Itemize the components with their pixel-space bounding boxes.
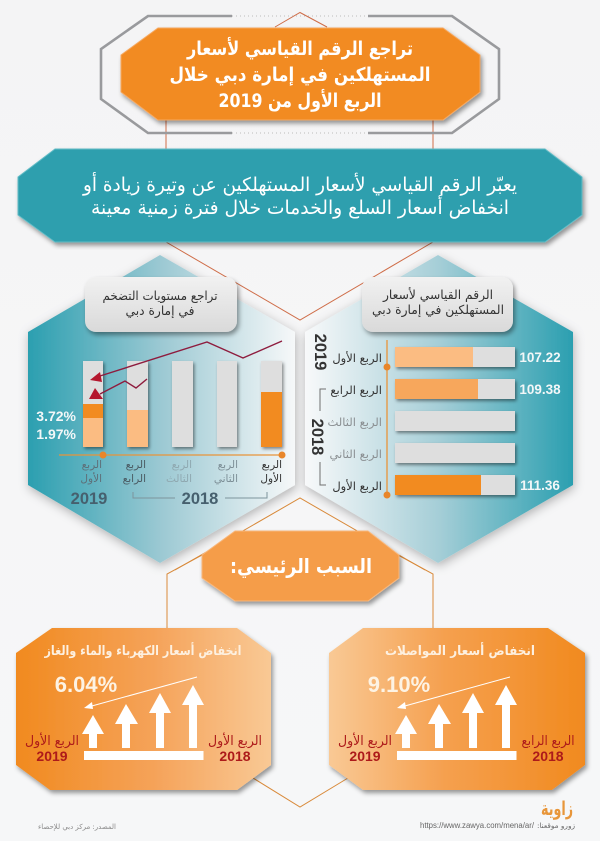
period labels: 2019 (349, 748, 381, 764)
period labels (338, 732, 574, 764)
teal definition banner: انخفاض أسعار السلع والخدمات خلال فترة زمنية معينة (91, 195, 509, 219)
teal definition banner: يعبّر الرقم القياسي لأسعار المستهلكين عن وتيرة زيادة أو (82, 172, 517, 196)
quarter labels: الربع الثالث (328, 415, 382, 430)
percent values (36, 408, 77, 442)
quarter labels: الربع الأول (332, 351, 382, 366)
year labels: 2018 (182, 490, 218, 508)
callout: CPI heading: الرقم القياسي لأسعار (382, 287, 493, 303)
title banner (121, 28, 480, 120)
callout: inflation heading: في إمارة دبي (126, 303, 195, 319)
year labels (71, 490, 267, 508)
year labels (308, 334, 329, 485)
period labels: الربع الأول (208, 732, 262, 749)
quarter labels: الأول (260, 472, 282, 485)
title banner: تراجع الرقم القياسي لأسعار (186, 37, 413, 60)
percent value: 9.10% (368, 672, 430, 697)
source note: المصدر: مركز دبي للإحصاء (38, 823, 116, 831)
website line: زورو موقعنا: (537, 822, 575, 830)
year labels: 2019 (71, 490, 107, 508)
timeline axis (59, 452, 286, 458)
quarter labels: الربع (172, 459, 192, 471)
period labels: 2018 (219, 748, 251, 764)
panel: transport (329, 628, 585, 790)
panel: electricity, water and gas (16, 628, 271, 790)
quarter labels: الرابع (123, 473, 146, 485)
CPI values: 111.36 (520, 478, 560, 493)
quarter labels (328, 351, 382, 494)
timeline axis (384, 340, 390, 498)
quarter labels: الربع الأول (332, 479, 382, 494)
CPI values: 109.38 (519, 382, 561, 397)
grey octagon frame (101, 16, 499, 133)
CPI values (519, 350, 561, 493)
period labels: الربع الأول (25, 732, 79, 749)
heading: main reason (202, 531, 399, 601)
trend arrow (397, 677, 510, 709)
quarter labels: الثاني (214, 473, 238, 485)
callout: inflation heading: تراجع مستويات التضخم (102, 288, 218, 304)
callout: CPI heading (362, 277, 513, 332)
quarter labels: الربع (82, 459, 102, 471)
title banner: الربع الأول من 2019 (218, 89, 382, 112)
quarter labels: الربع (262, 459, 282, 471)
period labels: الربع الرابع (522, 734, 574, 749)
panel heading: انخفاض أسعار المواصلات (385, 642, 535, 659)
quarter labels (80, 459, 282, 485)
year labels: 2018 (308, 419, 326, 455)
panel: CPI hexagon (305, 255, 573, 563)
period labels: 2019 (36, 748, 68, 764)
quarter labels: الربع الرابع (330, 383, 382, 398)
heading: main reason: السبب الرئيسي: (230, 554, 372, 579)
quarter labels: الربع الثاني (330, 447, 382, 462)
title banner: المستهلكين في إمارة دبي خلال (170, 64, 430, 86)
period labels (25, 732, 262, 764)
bar chart: CPI (395, 347, 515, 495)
website line: https://www.zawya.com/mena/ar/ (420, 821, 535, 830)
panel heading: انخفاض أسعار الكهرباء والماء والغاز (44, 642, 242, 659)
quarter labels: الأول (80, 472, 102, 485)
logo: Zawya: زاوية (541, 798, 573, 820)
quarter labels: الربع (218, 459, 238, 471)
connector lines (166, 12, 433, 807)
teal definition banner (18, 149, 582, 242)
callout: inflation heading (85, 277, 237, 332)
trend arrows (89, 341, 282, 399)
period labels: الربع الأول (338, 732, 392, 749)
year labels: 2019 (311, 334, 329, 370)
bar chart: inflation (83, 341, 282, 447)
percent value: 6.04% (55, 672, 117, 697)
period labels: 2018 (532, 748, 564, 764)
panel: inflation hexagon (28, 255, 295, 563)
icon: rising arrows (395, 685, 517, 760)
trend arrow (84, 677, 197, 709)
quarter labels: الربع (126, 459, 146, 471)
CPI values: 107.22 (519, 350, 561, 365)
percent values: 1.97% (36, 426, 77, 442)
icon: rising arrows (82, 685, 204, 760)
callout: CPI heading: المستهلكين في إمارة دبي (372, 302, 504, 318)
quarter labels: الثالث (166, 473, 192, 485)
percent values: 3.72% (36, 408, 77, 424)
